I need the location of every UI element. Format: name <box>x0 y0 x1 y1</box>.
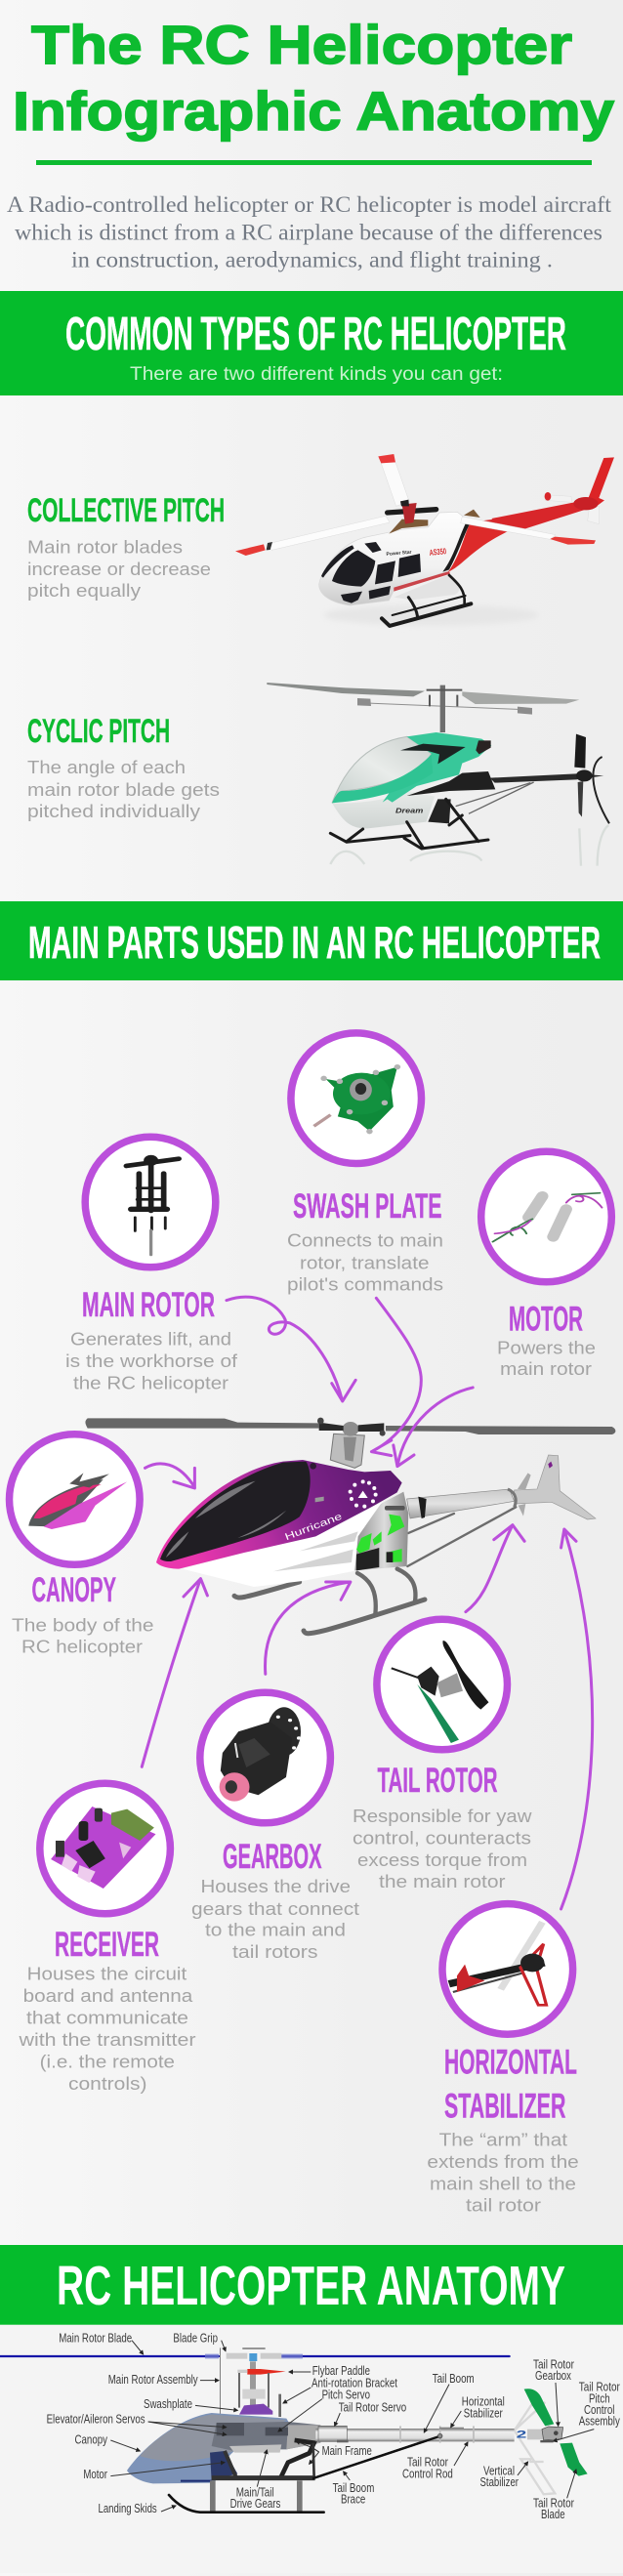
diagram labels: Gearbox <box>535 2369 572 2383</box>
heading and description: The body of the <box>12 1615 154 1636</box>
part: canopy <box>10 1434 154 1657</box>
heading and description: RECEIVER <box>55 1926 159 1964</box>
heading and description <box>427 2043 579 2215</box>
heading and description: controls) <box>68 2073 146 2094</box>
heading and description: excess torque from <box>357 1849 527 1870</box>
diagram labels: Anti-rotation Bracket <box>312 2376 397 2389</box>
illustration: green cyclic pitch helicopter <box>267 683 609 866</box>
diagram labels: Stabilizer <box>480 2475 519 2489</box>
intro paragraph: A Radio-controlled helicopter or RC helicopter is model aircraft <box>7 192 612 217</box>
belly <box>394 575 459 600</box>
part: horizontal stabilizer <box>427 1904 579 2215</box>
heading and description: extends from the <box>427 2151 579 2172</box>
heading and description: control, counteracts <box>353 1827 531 1848</box>
landing skids <box>169 2495 324 2513</box>
heading and description: Generates lift, and <box>70 1329 231 1350</box>
part: tail rotor <box>353 1619 532 1891</box>
diagram labels: Control Rod <box>402 2467 453 2480</box>
diagram labels: Swashplate <box>144 2397 192 2411</box>
title: The RC Helicopter <box>31 14 572 75</box>
heading and description: Houses the circuit <box>27 1964 187 1984</box>
heading and description <box>18 1926 195 2094</box>
heading and description <box>191 1838 359 1962</box>
diagram labels: Drive Gears <box>230 2497 280 2511</box>
heading and description <box>497 1301 596 1379</box>
banner: common types <box>0 291 623 395</box>
landing skid <box>304 1569 425 1634</box>
part: swash plate <box>287 1033 443 1295</box>
diagram labels: Main Rotor Assembly <box>108 2373 198 2387</box>
rotor blades <box>235 454 409 556</box>
heading and description <box>287 1187 443 1295</box>
tail rotor gearbox <box>540 2427 563 2442</box>
icon: receiver <box>40 1783 170 1914</box>
icon: horizontal stabilizer <box>442 1904 573 2034</box>
vertical stabilizer <box>515 2402 555 2494</box>
rotor mast <box>317 1418 386 1468</box>
frame and servos <box>181 2422 320 2513</box>
diagram labels: Main Frame <box>322 2444 372 2458</box>
part: main rotor <box>65 1137 238 1393</box>
arrow: horizontal stabilizer <box>561 1529 593 1909</box>
part: motor <box>481 1151 611 1379</box>
icon: gearbox <box>200 1692 330 1823</box>
main rotor blade <box>85 1418 615 1434</box>
heading and description: Connects to main <box>287 1230 443 1251</box>
side panel <box>273 1492 408 1571</box>
heading and description: rotor, translate <box>300 1252 430 1272</box>
arrow: main rotor <box>227 1297 355 1401</box>
diagram labels: Tail Rotor <box>533 2496 574 2510</box>
text block: collective pitch: pitch equally <box>27 580 142 601</box>
icon: motor <box>481 1151 611 1282</box>
heading and description: gears that connect <box>191 1898 359 1919</box>
rotor head <box>220 2347 286 2417</box>
heading and description: Powers the <box>497 1338 596 1358</box>
arrows: upper parts to helicopter <box>227 1297 473 1467</box>
arrow: canopy <box>145 1464 194 1488</box>
diagram labels: Flybar Paddle <box>312 2364 370 2378</box>
heading and description: main shell to the <box>430 2173 576 2193</box>
heading and description: to the main and <box>205 1920 346 1940</box>
text block: collective pitch <box>27 492 225 601</box>
illustration: red and white collective pitch helicopter: Power Star <box>386 550 412 558</box>
icon: tail rotor <box>377 1619 508 1750</box>
title: Infographic Anatomy <box>13 80 614 142</box>
arrow: receiver <box>142 1579 207 1766</box>
text block: cyclic pitch: main rotor blade gets <box>27 779 220 800</box>
heading and description: tail rotors <box>232 1941 318 1962</box>
intro paragraph <box>7 192 612 271</box>
icon: main rotor <box>85 1137 216 1267</box>
heading and description: TAIL ROTOR <box>377 1762 498 1800</box>
landing skid <box>382 575 471 626</box>
tail brace <box>314 2436 439 2478</box>
heading and description: Responsible for yaw <box>353 1806 532 1826</box>
main rotor blade <box>0 2352 510 2359</box>
canopy and green decal: Dream <box>395 807 424 815</box>
diagram: helicopter left half <box>0 2341 510 2513</box>
rear skid and struts <box>234 1507 516 1598</box>
main rotor and flybar <box>267 683 579 732</box>
heading and description: SWASH PLATE <box>293 1187 441 1226</box>
diagram labels: Main/Tail <box>236 2485 274 2499</box>
leader arrows <box>110 2341 322 2512</box>
intro paragraph: which is distinct from a RC airplane because of the differences <box>15 221 602 244</box>
heading and description: (i.e. the remote <box>40 2052 175 2072</box>
illustration: red and white collective pitch helicopter <box>235 454 614 626</box>
text block: collective pitch: increase or decrease <box>27 559 211 579</box>
diagram labels <box>47 2331 620 2521</box>
diagram labels: Stabilizer <box>464 2406 503 2420</box>
tail boom <box>315 2426 544 2443</box>
diagram labels: Tail Boom <box>333 2481 374 2495</box>
arrows: lower parts to helicopter <box>142 1464 593 1909</box>
heading and description <box>353 1762 532 1891</box>
icon: swash plate <box>291 1033 422 1163</box>
heading and description: the main rotor <box>379 1871 506 1891</box>
body <box>183 1502 383 1587</box>
heading and description: CANOPY <box>31 1571 116 1609</box>
arrow: swash plate <box>371 1298 421 1456</box>
leader arrows <box>296 2383 594 2498</box>
arrow: gearbox <box>266 1582 351 1674</box>
diagram labels: Tail Rotor Servo <box>339 2400 406 2414</box>
diagram labels: Motor <box>83 2468 107 2481</box>
diagram labels: Pitch Servo <box>322 2388 370 2401</box>
landing skids <box>330 799 488 849</box>
heading and description: is the workhorse of <box>65 1350 238 1371</box>
tail boom and fins <box>407 1455 596 1519</box>
diagram labels: Vertical <box>483 2464 515 2477</box>
tail boom and fin <box>491 457 614 531</box>
canopy and green decal <box>332 732 491 828</box>
icon: canopy <box>10 1434 140 1564</box>
diagram labels: Horizontal <box>462 2394 505 2408</box>
diagram: helicopter right half <box>296 2383 594 2498</box>
diagram labels: Blade Grip <box>173 2331 218 2345</box>
heading and description: that communicate <box>26 2008 188 2028</box>
tail rotor blades <box>524 2389 588 2476</box>
diagram labels: Main Rotor Blade <box>59 2331 132 2345</box>
heading and description <box>65 1286 238 1393</box>
reflection <box>330 825 608 866</box>
panel: anatomy diagram background <box>0 2325 623 2573</box>
title <box>13 14 614 142</box>
text block: cyclic pitch: CYCLIC PITCH <box>27 713 170 750</box>
frame, tail boom and tail rotor <box>407 734 609 823</box>
black canopy <box>160 1462 311 1561</box>
intro paragraph: in construction, aerodynamics, and flight training . <box>71 248 553 271</box>
part: receiver <box>18 1783 195 2094</box>
heading and description: tail rotor <box>466 2194 541 2215</box>
rotor hub <box>388 500 596 545</box>
central illustration: purple Hurricane helicopter <box>85 1418 615 1634</box>
star emblem <box>349 1479 378 1509</box>
diagram labels: Tail Rotor <box>407 2456 448 2470</box>
arrow: tail rotor <box>466 1525 524 1612</box>
tail brace <box>312 2436 439 2478</box>
model name: Hurricane <box>283 1512 345 1543</box>
text block: cyclic pitch <box>27 713 220 821</box>
heading and description: RC helicopter <box>21 1637 143 1657</box>
red model text: AS350 <box>429 546 447 558</box>
banner: common types: There are two different kinds you can get: <box>130 364 503 385</box>
heading and description: main rotor <box>500 1358 592 1379</box>
heading and description <box>12 1571 154 1657</box>
text block: collective pitch: Main rotor blades <box>27 537 183 557</box>
diagram labels: Blade <box>541 2508 565 2521</box>
heading and description: with the transmitter <box>18 2029 195 2050</box>
heading and description: pilot's commands <box>287 1274 443 1295</box>
diagram labels: Pitch <box>589 2391 610 2405</box>
heading and description: GEARBOX <box>223 1838 322 1876</box>
text block: collective pitch: COLLECTIVE PITCH <box>27 492 225 529</box>
heading and description: Houses the drive <box>201 1876 351 1896</box>
fuselage <box>319 512 469 605</box>
diagram labels: Landing Skids <box>98 2502 157 2515</box>
text block: cyclic pitch: The angle of each <box>27 757 186 777</box>
diagram labels: Elevator/Aileron Servos <box>47 2412 145 2426</box>
windows <box>321 542 421 603</box>
heading and description: MAIN ROTOR <box>82 1286 215 1324</box>
text block: cyclic pitch: pitched individually <box>27 801 201 821</box>
translucent canopy <box>127 2413 291 2483</box>
diagram labels: Brace <box>341 2493 365 2507</box>
diagram labels: Canopy <box>74 2432 108 2446</box>
heading and description: board and antenna <box>23 1985 193 2006</box>
diagram labels: Tail Boom <box>433 2372 475 2386</box>
tail boom: 2 <box>517 2429 526 2440</box>
arrow: motor <box>394 1388 473 1467</box>
diagram labels: Control <box>584 2403 614 2417</box>
diagram labels: Tail Rotor <box>533 2357 574 2371</box>
banner: main parts <box>0 901 623 980</box>
heading and description: The “arm” that <box>439 2129 567 2149</box>
part: gearbox <box>191 1692 359 1962</box>
heading and description: the RC helicopter <box>73 1373 228 1393</box>
